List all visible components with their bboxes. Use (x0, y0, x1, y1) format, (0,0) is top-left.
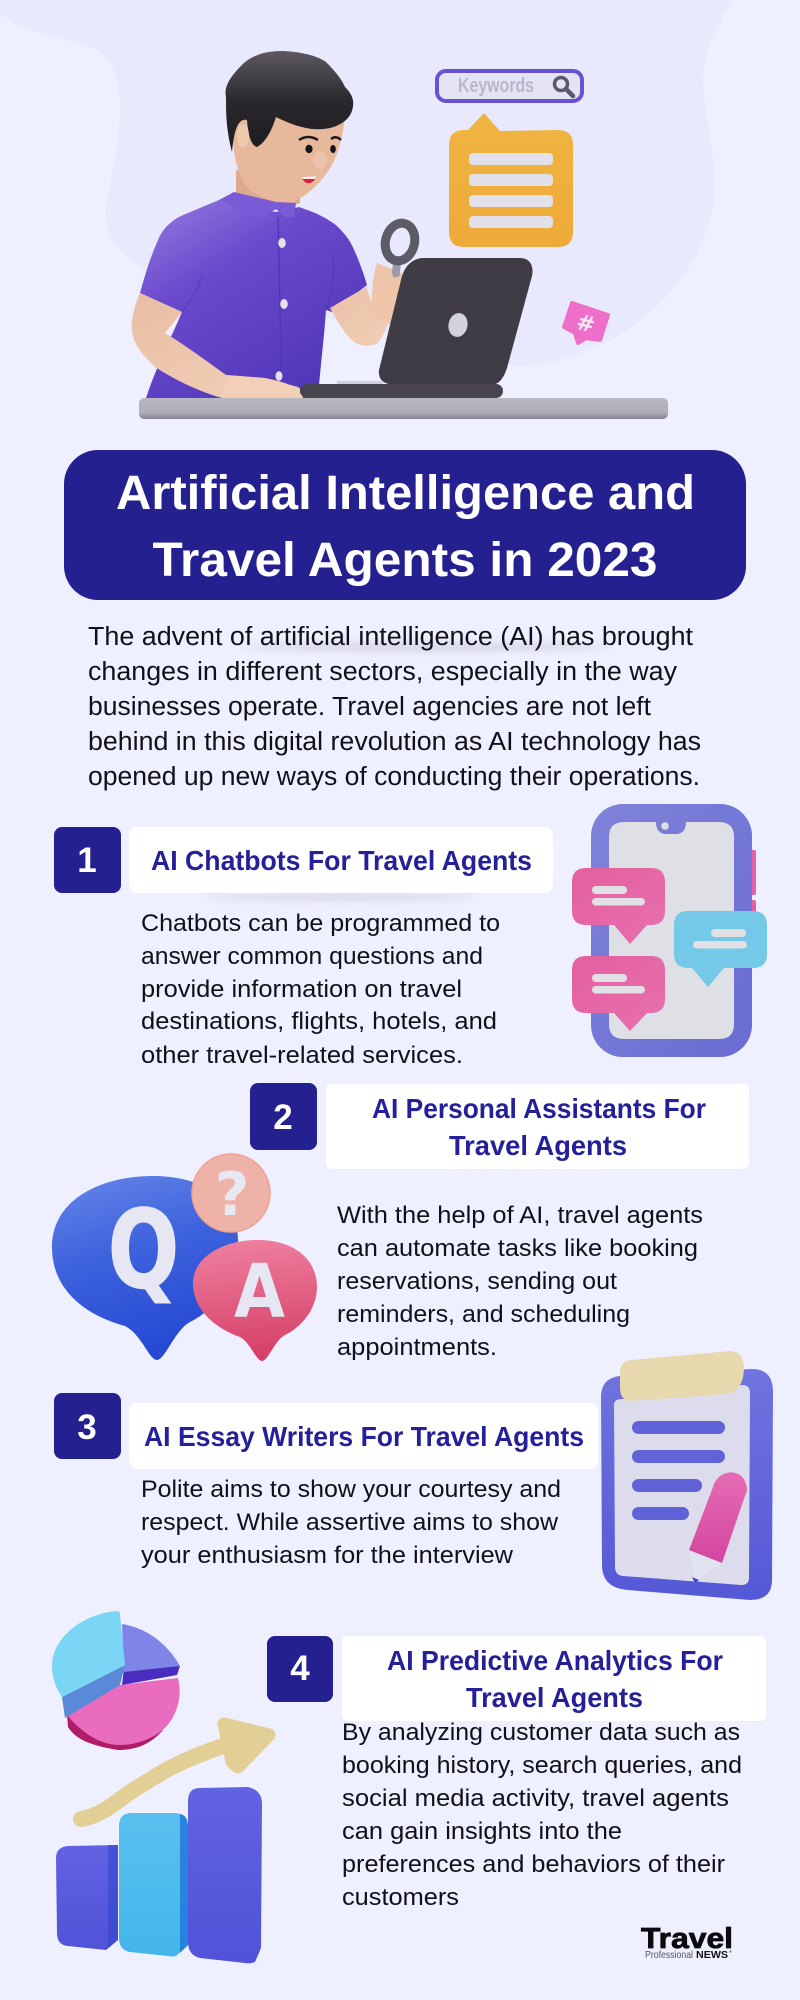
title banner: Artificial Intelligence and (116, 467, 695, 520)
hand on desk (222, 375, 303, 398)
orange document bubble (449, 113, 573, 247)
purple slice (122, 1624, 180, 1672)
phone body (591, 804, 752, 1057)
paper (614, 1385, 750, 1585)
board (601, 1369, 773, 1600)
hashtag bubble (564, 303, 608, 343)
ear (237, 124, 249, 148)
body text 2: can automate tasks like booking (337, 1235, 698, 1262)
number badge 1 (54, 827, 121, 893)
blue bubble (674, 911, 767, 987)
heading 4 (342, 1636, 766, 1721)
pink slice side (67, 1715, 163, 1750)
keyboard edge (337, 381, 383, 385)
body text 4: preferences and behaviors of their (342, 1851, 725, 1878)
intro paragraph (88, 623, 701, 791)
title banner (64, 450, 746, 600)
icon: bar chart with arrow (56, 1724, 269, 1963)
face (232, 90, 345, 203)
background blob (0, 0, 732, 365)
intro paragraph: opened up new ways of conducting their operations. (88, 763, 700, 791)
laptop base (300, 384, 503, 398)
heading 3: AI Essay Writers For Travel Agents (144, 1421, 584, 1452)
blue Q bubble (52, 1176, 238, 1360)
intro paragraph: businesses operate. Travel agencies are not left (88, 693, 651, 721)
heading 2: AI Personal Assistants For (372, 1093, 706, 1124)
body text 4 (342, 1719, 742, 1911)
hair (226, 51, 353, 152)
section 3: AI essay writers (54, 1393, 598, 1569)
number badge 4: 4 (290, 1649, 310, 1688)
body text 3: respect. While assertive aims to show (141, 1509, 559, 1536)
body text 1: Chatbots can be programmed to (141, 910, 500, 937)
intro paragraph: changes in different sectors, especially in the way (88, 658, 677, 686)
heading 2 (326, 1084, 749, 1169)
laptop logo (446, 311, 470, 339)
phone screen (609, 822, 734, 1039)
body text 1: destinations, flights, hotels, and (141, 1008, 497, 1035)
left arm (132, 293, 303, 398)
logo: Travel Professional News: ® (729, 1949, 732, 1954)
heading 4: AI Predictive Analytics For (387, 1645, 723, 1676)
blue slice side (62, 1665, 125, 1718)
hand fingers (372, 265, 402, 325)
faint shadow under heading 1 (200, 894, 480, 900)
nose (313, 151, 327, 169)
number badge 4 (267, 1636, 333, 1702)
laptop screen (379, 258, 532, 385)
bar left (56, 1845, 118, 1950)
sleeve seams (182, 250, 334, 312)
shirt placket (278, 217, 282, 397)
number badge 3 (54, 1393, 121, 1459)
pink A bubble: A (234, 1249, 285, 1335)
desk (139, 398, 668, 419)
icon: clipboard with pen (601, 1351, 773, 1600)
icon: pie chart (52, 1611, 180, 1750)
pink slice (67, 1678, 180, 1745)
blue slice (52, 1611, 125, 1697)
shirt buttons (276, 238, 288, 381)
hero illustration: man at laptop (132, 51, 668, 419)
side buttons (750, 850, 756, 918)
logo: Travel Professional News: Travel (641, 1923, 733, 1955)
text lines (632, 1421, 725, 1520)
body text 2: appointments. (337, 1334, 497, 1361)
faint shadow under intro line (241, 643, 611, 651)
shirt (140, 200, 367, 398)
body text 3: your enthusiasm for the interview (141, 1542, 514, 1569)
intro paragraph: The advent of artificial intelligence (AI) has brought (88, 623, 693, 651)
collar (219, 192, 296, 218)
pink A bubble (193, 1240, 317, 1361)
body text 2: reservations, sending out (337, 1268, 617, 1295)
number badge 2 (250, 1083, 317, 1150)
heading 1 (129, 827, 553, 893)
eyes and brows (299, 137, 341, 153)
body text 1 (141, 910, 500, 1069)
icon: phone with chat bubbles (572, 804, 767, 1057)
pen (689, 1472, 747, 1583)
body text 4: booking history, search queries, and (342, 1752, 742, 1779)
camera (661, 822, 669, 830)
magnifier (381, 220, 419, 282)
section 1: AI chatbots (54, 827, 553, 1069)
hashtag bubble: # (574, 310, 598, 339)
clip (620, 1351, 744, 1401)
body text 2: With the help of AI, travel agents (337, 1202, 703, 1229)
section 2: AI personal assistants (250, 1083, 749, 1361)
section 4: AI predictive analytics (267, 1636, 766, 1911)
logo: Travel Professional News: Professional (645, 1950, 693, 1961)
heading 1: AI Chatbots For Travel Agents (151, 845, 532, 876)
question circle: ? (215, 1160, 249, 1230)
body text 1: provide information on travel (141, 976, 462, 1003)
heading 4: Travel Agents (466, 1682, 643, 1713)
title banner: Travel Agents in 2023 (152, 534, 658, 587)
body text 2 (337, 1202, 703, 1361)
logo: Travel Professional News: NEWS (696, 1950, 728, 1961)
bar middle (119, 1813, 188, 1956)
body text 1: answer common questions and (141, 943, 483, 970)
body text 3 (141, 1476, 561, 1569)
keyword search bar (437, 71, 582, 101)
body text 1: other travel-related services. (141, 1042, 463, 1069)
right forearm (330, 263, 402, 346)
body text 4: customers (342, 1884, 459, 1911)
body text 2: reminders, and scheduling (337, 1301, 630, 1328)
question circle (192, 1154, 270, 1232)
purple slice side (122, 1666, 180, 1685)
number badge 1: 1 (77, 841, 97, 880)
intro paragraph: behind in this digital revolution as AI technology has (88, 728, 701, 756)
body text 4: By analyzing customer data such as (342, 1719, 740, 1746)
keyword search bar: Keywords (458, 75, 534, 97)
number badge 3: 3 (77, 1408, 97, 1447)
body text 4: social media activity, travel agents (342, 1785, 729, 1812)
heading 3 (129, 1403, 598, 1469)
bar left side (108, 1845, 118, 1948)
body text 4: can gain insights into the (342, 1818, 622, 1845)
number badge 2: 2 (273, 1098, 293, 1137)
pink bubble bottom (572, 956, 665, 1031)
mouth (302, 176, 317, 183)
neck (236, 170, 300, 210)
bar middle side (180, 1814, 188, 1953)
bar right (188, 1787, 262, 1963)
icon: Q and A speech bubbles (52, 1154, 317, 1361)
growth arrow (81, 1724, 269, 1819)
heading 2: Travel Agents (449, 1130, 627, 1161)
blue Q bubble: Q (108, 1188, 179, 1313)
body text 3: Polite aims to show your courtesy and (141, 1476, 561, 1503)
pink bubble top (572, 868, 665, 944)
